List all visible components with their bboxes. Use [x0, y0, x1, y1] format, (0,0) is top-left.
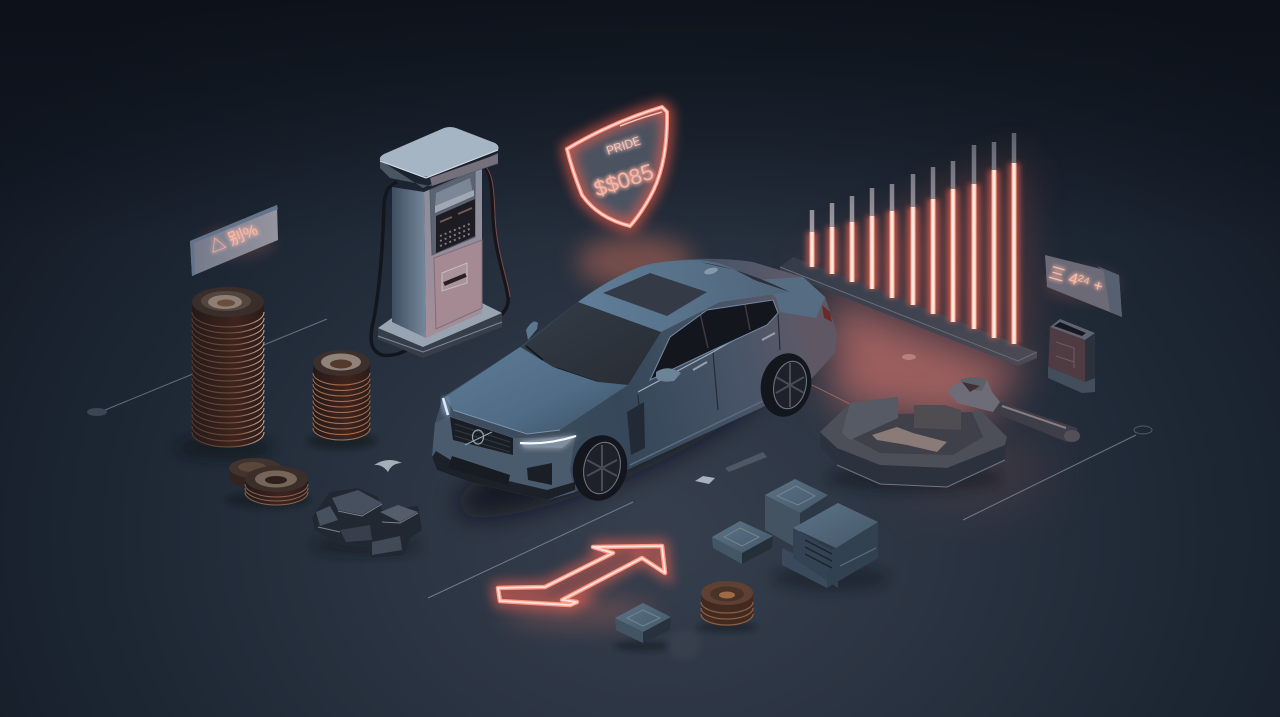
- wipers: [526, 346, 597, 382]
- right hose: [483, 165, 508, 316]
- car headlights: [520, 435, 577, 448]
- pump card slot: [442, 263, 467, 291]
- neon arrow: [498, 546, 665, 605]
- price shield: [567, 107, 667, 226]
- left warning sign: [190, 205, 278, 276]
- tray back blocks: [914, 405, 961, 430]
- bars lit: [812, 163, 1014, 344]
- small utility box: [1048, 319, 1095, 393]
- fuel pump: [371, 127, 510, 358]
- right neon sign: [1045, 255, 1122, 317]
- warning sign text: △ 别%: [207, 221, 260, 257]
- left hose: [371, 182, 412, 355]
- car side windows: [650, 300, 778, 380]
- pump display: [436, 199, 475, 253]
- car rear panel: [790, 277, 837, 378]
- front wheel: [567, 430, 633, 506]
- small box: [712, 521, 773, 564]
- top box: [765, 479, 828, 550]
- red floor glow: [504, 155, 1050, 628]
- pump cap: [380, 153, 498, 188]
- car mirrors: [526, 322, 538, 340]
- right sign text: 三 4²⁴ +: [1047, 265, 1105, 296]
- rear wheel: [755, 349, 817, 421]
- broken metal pile: [311, 488, 422, 558]
- wrench and tray: [820, 377, 1080, 492]
- chart base rail: [780, 257, 1037, 366]
- car door lines: [627, 313, 780, 465]
- car sunroof: [603, 273, 707, 316]
- front coin stack: [697, 581, 757, 632]
- pump screen panel: [430, 171, 475, 255]
- car: [432, 259, 837, 543]
- car shadow: [444, 347, 776, 543]
- shield label: PRIDE: [605, 135, 643, 158]
- large box: [782, 503, 878, 588]
- tray outer wall: [820, 432, 1007, 487]
- rear windscreen and spoiler: [700, 262, 790, 292]
- shield price: $$085: [591, 159, 657, 202]
- car handles: [693, 333, 775, 370]
- tall coin stack: [177, 287, 273, 460]
- bar glow: [812, 163, 1014, 344]
- pump front face: [424, 167, 482, 338]
- car lower intakes: [448, 456, 510, 485]
- thin guide lines: [87, 319, 1152, 598]
- pump left face: [392, 187, 426, 338]
- car roof: [578, 260, 790, 332]
- fuel coin stacks: [177, 287, 376, 508]
- tray wrench parts: [872, 427, 947, 452]
- small floor marks: [695, 354, 916, 484]
- tray rim: [820, 397, 1007, 468]
- car windshield: [522, 302, 661, 385]
- car hood: [445, 347, 628, 434]
- car front bumper: [432, 416, 575, 500]
- wrench: [947, 377, 1080, 442]
- stacked boxes: [712, 479, 888, 591]
- car body: [432, 259, 837, 500]
- small coin pile: [226, 458, 310, 508]
- front cube: [614, 603, 671, 651]
- bar tops: [812, 133, 1014, 232]
- small floor clip: [374, 460, 402, 472]
- tray floor: [852, 412, 983, 455]
- car grille: [450, 417, 513, 455]
- faint floor smudge: [667, 630, 701, 660]
- pump base: [378, 313, 502, 358]
- tray: [820, 397, 1007, 492]
- neon bar chart: [780, 133, 1037, 366]
- medium coin stack: [308, 350, 376, 449]
